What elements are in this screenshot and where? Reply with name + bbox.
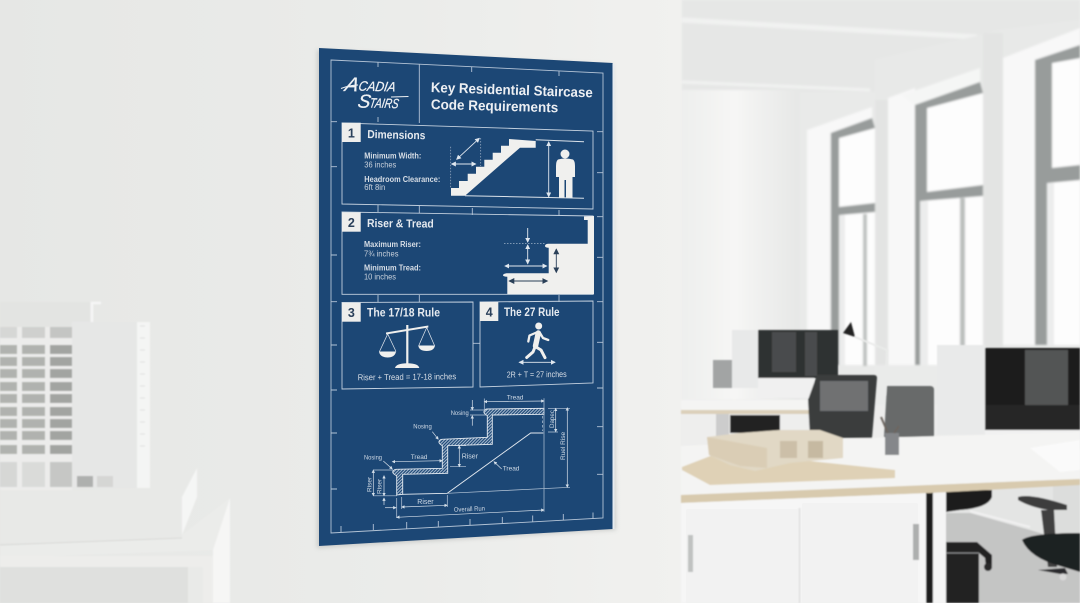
badge 1 xyxy=(342,123,361,142)
logo: Acadia Stairs xyxy=(341,74,408,113)
riser and tread stair diagram xyxy=(503,216,594,294)
dimension labels: Dapec xyxy=(549,410,556,428)
riser and tread text: 10 inches xyxy=(364,272,396,282)
logo: Acadia Stairs: A xyxy=(342,74,361,96)
pillar 1 xyxy=(875,100,888,410)
badge 4: 4 xyxy=(486,306,493,320)
dimension labels xyxy=(364,394,567,514)
heading: Dimensions: Dimensions xyxy=(367,129,425,142)
hatched stair profile xyxy=(393,408,544,495)
logo: Acadia Stairs: CADIA xyxy=(358,79,397,94)
icon: balance scale xyxy=(379,325,435,368)
dimension labels: Tread xyxy=(503,466,520,473)
dimensions text: Headroom Clearance: xyxy=(364,175,440,184)
dimensions text: 36 inches xyxy=(364,161,396,170)
under desk xyxy=(926,480,1080,603)
heading: Riser & Tread: Riser & Tread xyxy=(367,218,434,231)
dimension labels: Nosing xyxy=(413,424,432,431)
badge 3: 3 xyxy=(348,306,355,320)
title: Code Requirements xyxy=(431,96,559,115)
architectural model on left table xyxy=(0,302,230,603)
dimension labels: Riser xyxy=(376,478,384,494)
leader arrows xyxy=(383,400,502,508)
walking caption: 2R + T = 27 inches xyxy=(507,369,567,379)
window 2 xyxy=(915,82,983,375)
blueprint poster xyxy=(319,48,614,546)
badge 2 xyxy=(342,212,361,232)
riser and tread text: Maximum Riser: xyxy=(364,240,421,249)
blueprint frame and ticks xyxy=(331,60,603,533)
icon: person xyxy=(556,150,575,198)
badge 2: 2 xyxy=(348,216,355,230)
panel: 4 The 27 Rule xyxy=(480,301,593,387)
dimension labels: Riser xyxy=(366,476,374,492)
panel: 1 Dimensions xyxy=(342,123,593,209)
white wall background xyxy=(0,0,682,603)
dimension labels: Tread xyxy=(507,394,524,402)
scale caption: Riser + Tread = 17-18 inches xyxy=(358,371,456,382)
title: Key Residential Staircase xyxy=(431,79,593,100)
riser and tread text: Minimum Tread: xyxy=(364,264,421,272)
poster board xyxy=(319,48,613,546)
heading: The 27 Rule: The 27 Rule xyxy=(504,307,560,319)
window 1 xyxy=(807,107,872,370)
title xyxy=(431,79,593,115)
construction lines xyxy=(373,398,570,518)
dimensions text: 6ft 8in xyxy=(364,183,385,192)
dimensions text: Minimum Width: xyxy=(364,152,421,160)
dimension labels: Ruel Rise xyxy=(560,431,567,460)
dimension arrows xyxy=(373,401,567,517)
desk surface xyxy=(681,432,1080,495)
walking arrow xyxy=(519,361,555,363)
cabinet xyxy=(681,493,930,603)
pencil holder xyxy=(885,433,899,455)
wooden model xyxy=(682,455,895,485)
dimension labels: Tread xyxy=(411,454,428,461)
dimension labels: Riser xyxy=(417,499,434,506)
panel: 2 Riser & Tread xyxy=(342,212,594,294)
dimension labels: Nosing xyxy=(364,455,382,462)
keyboard on desk xyxy=(1030,440,1080,472)
technical stair section drawing xyxy=(364,394,570,518)
badge 1: 1 xyxy=(348,126,355,140)
logo: Acadia Stairs: TAIRS xyxy=(369,96,400,111)
icon: walking person xyxy=(527,322,548,358)
riser and tread text xyxy=(364,240,421,282)
office room background xyxy=(682,0,1080,603)
riser and tread text: 7¾ inches xyxy=(364,250,398,258)
window 3 xyxy=(1035,45,1080,345)
staircase and person diagram xyxy=(451,138,584,198)
panel: 3 The 17/18 Rule xyxy=(342,302,473,389)
pillar 2 xyxy=(983,33,1003,410)
poster shadow xyxy=(317,50,616,548)
logo: Acadia Stairs: S xyxy=(356,92,373,113)
dimension labels: Overall Run xyxy=(454,505,485,514)
dimension labels: Riser xyxy=(462,453,479,460)
underside line xyxy=(403,433,543,494)
dimensions text xyxy=(364,152,440,192)
heading: The 17/18 Rule: The 17/18 Rule xyxy=(367,307,440,319)
back wall lower area xyxy=(682,400,1080,450)
office desks, monitors and chairs xyxy=(681,322,1080,603)
dimension labels: Nosing xyxy=(451,410,469,417)
